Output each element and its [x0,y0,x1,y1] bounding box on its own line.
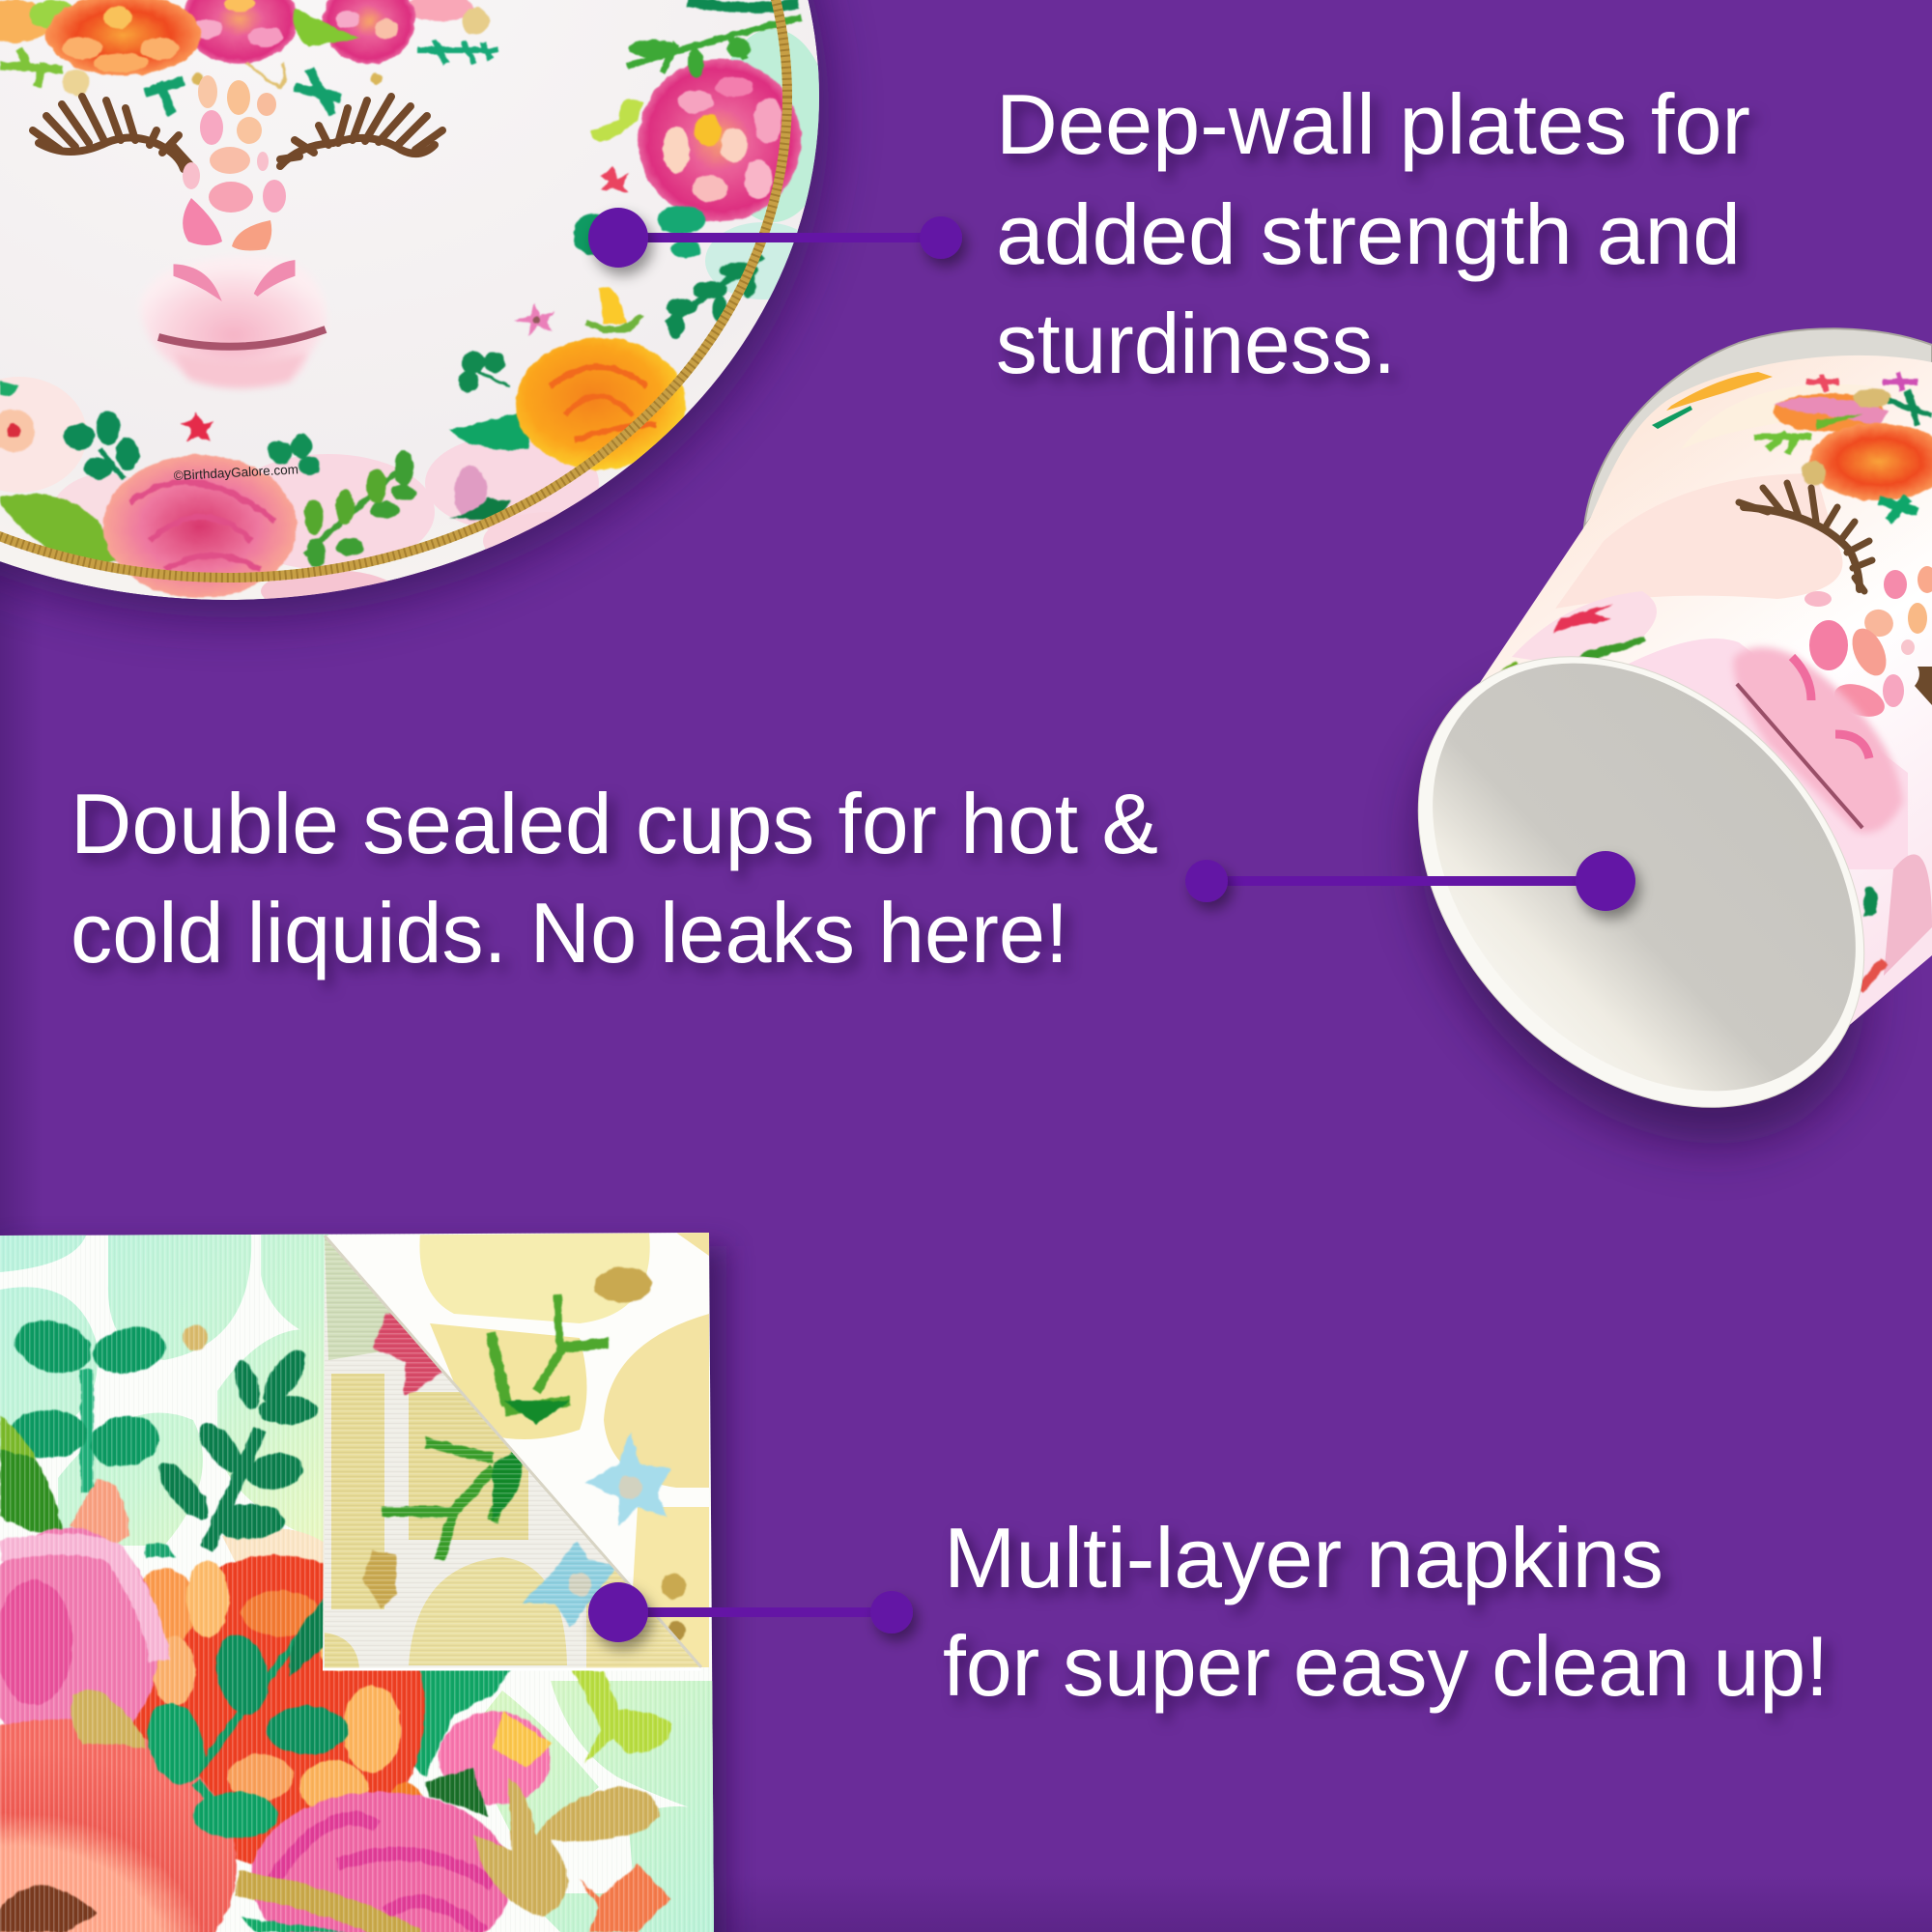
sprigs: right rim [573,2,802,340]
plate rim tint blobs [0,29,831,612]
text: napkins: for super easy clean up! [943,1618,1829,1714]
cup base [1329,568,1932,1196]
napkin yellow back corner [319,1227,715,1671]
napkin folded flap [319,1227,705,1676]
orange rose [449,338,686,469]
small blossoms on plate [0,166,642,479]
panel: napkin [0,1227,720,1932]
callout: cups connector [1185,851,1635,911]
plate top floral crown [0,0,497,114]
giraffe petals [183,75,286,250]
peony: right [591,59,801,221]
cup body [1430,328,1932,1082]
napkin flowers [0,1528,670,1932]
callout: napkins connector [588,1582,913,1642]
callout: plates connector [588,208,962,268]
text: plates: added strength and [996,186,1741,282]
pink rose [0,455,297,598]
text: napkins [943,1510,1829,1714]
copyright text: ©BirthdayGalore.com [173,462,298,483]
napkin rib texture [0,1233,715,1932]
text: cups: cold liquids. No leaks here! [71,885,1068,980]
napkin pastel blobs [0,1233,328,1546]
panel: paper plate [0,0,831,612]
text: plates: sturdiness. [996,296,1396,391]
plate shadow [0,0,829,617]
gold glitter ring [0,0,787,578]
napkin shadow [0,1246,726,1932]
sprig and bud [304,450,512,567]
text: cups: Double sealed cups for hot & [71,776,1158,871]
cup nose [1733,647,1932,833]
text: plates [996,76,1750,391]
cup shadow [1330,604,1932,1232]
giraffe nose [140,257,327,388]
cup rim [1584,328,1932,526]
cup eyelash [1739,483,1872,591]
cup giraffe petals [1804,566,1932,723]
napkin teal leaves [71,1599,673,1918]
eyelashes [33,97,442,169]
text: plates: Deep-wall plates for [996,76,1750,172]
napkin sprouts [0,1313,317,1557]
panel: paper cup [1329,328,1932,1196]
text: napkins: Multi-layer napkins [944,1510,1663,1605]
cup floral motif [1463,372,1932,990]
text: cups [71,776,1158,980]
